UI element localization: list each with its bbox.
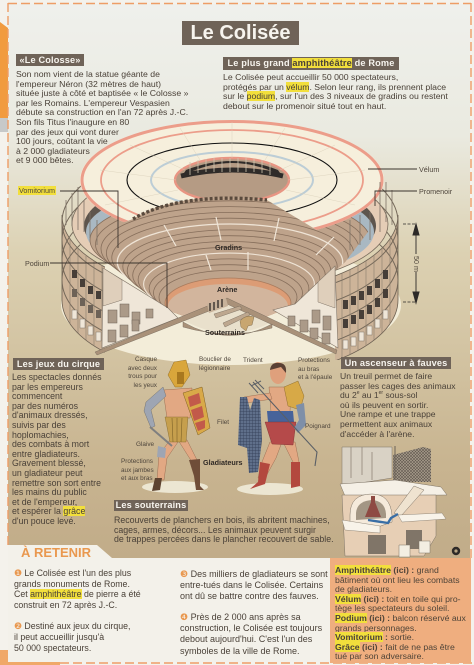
promenoir leader xyxy=(375,191,417,206)
label: protections jambes xyxy=(121,458,154,482)
text: jeux du cirque: suivis par des xyxy=(12,420,66,430)
point 1: grands monuments de Rome. xyxy=(14,579,130,589)
label: protections bras xyxy=(298,357,332,381)
text: le colosse: par des jeux qui vont durer xyxy=(16,127,119,137)
retenir white panel xyxy=(8,545,330,662)
gladiator with shield xyxy=(142,360,210,493)
point 1: Cet amphithéâtre de pierre a été xyxy=(14,589,141,599)
belt xyxy=(267,411,294,422)
page-number badge xyxy=(452,547,460,555)
label: gradins: Gradins xyxy=(215,243,242,252)
label: protections bras: et à l'épaule xyxy=(298,374,332,381)
point 1: construit en 72 après J.-C. xyxy=(14,600,117,610)
label: protections jambes: Protections xyxy=(121,458,153,465)
point 4: construction, le Colisée est toujours xyxy=(180,623,322,633)
label: protections jambes: aux jambes xyxy=(121,467,154,474)
glossary: Grâce (ici) : fait de ne pas être xyxy=(335,642,455,652)
label: trident: Trident xyxy=(243,357,263,364)
title: Le Colisée xyxy=(190,22,291,44)
text: jeux du cirque: entre gladiateurs. xyxy=(12,449,80,459)
heading: souterrains: Les souterrains xyxy=(116,500,186,510)
text: le colosse: située juste à côté et baptisée « le Colosse » xyxy=(16,88,188,98)
text: ascenseur: permettent aux animaux xyxy=(340,419,432,429)
velum inner opening xyxy=(175,158,289,202)
glossary: tège les spectateurs du soleil. xyxy=(335,603,449,613)
text: le colosse: et 9 000 bêtes. xyxy=(16,155,73,165)
point 1 xyxy=(14,568,141,610)
point 2 xyxy=(14,621,130,653)
text: amphitheatre: Le Colisée peut accueillir 50 000 spectateurs, xyxy=(223,72,398,82)
text: le colosse: par les Romains. L'empereur Vespasien xyxy=(16,98,170,108)
label: poignard: Poignard xyxy=(305,423,331,430)
ramp xyxy=(394,486,424,516)
text: souterrains: de trappes percées dans le plancher recouvert de sable. xyxy=(114,534,334,544)
columns drums xyxy=(399,541,430,557)
label: velum: Vélum xyxy=(419,165,439,174)
seating stair lines xyxy=(164,217,334,270)
blue arm guard xyxy=(294,403,306,433)
net wall xyxy=(393,447,431,482)
glossary panel xyxy=(330,558,471,663)
point 1: ❶ Le Colisée est l'un des plus xyxy=(14,568,131,578)
orange side tab xyxy=(0,22,8,118)
text: ascenseur: Une rampe et une trappe xyxy=(340,409,436,419)
shield xyxy=(183,387,210,435)
gold shoulder xyxy=(284,381,304,410)
heading: a retenir: À RETENIR xyxy=(21,545,91,560)
trident xyxy=(253,382,317,466)
label: gladiateurs: Gladiateurs xyxy=(203,458,243,467)
text: le colosse: débute sa construction en l'an 72 après J.-C. xyxy=(16,107,188,117)
outer wall xyxy=(62,186,398,360)
colosseum illustration xyxy=(50,120,419,378)
text: jeux du cirque: par les empereurs xyxy=(12,382,83,392)
ground-level arches xyxy=(72,310,388,349)
dagger xyxy=(150,427,172,446)
text: jeux du cirque: Les spectacles donnés xyxy=(12,372,102,382)
lower building xyxy=(342,495,436,556)
glossary: grands personnages. xyxy=(335,623,417,633)
text: jeux du cirque: des combats à mort xyxy=(12,439,89,449)
point 2: 50 000 spectateurs. xyxy=(14,643,91,653)
ground pool xyxy=(61,245,401,365)
souterrains wedge xyxy=(95,298,337,355)
text: le colosse: Son nom vient de la statue géante de xyxy=(16,69,160,79)
grey side tab xyxy=(0,118,8,132)
text: amphitheatre: sur le podium, sur l'un des 3 niveaux de gradins ou restent xyxy=(223,91,448,101)
text: jeux du cirque: d'animaux dressés, xyxy=(12,410,88,420)
label: souterrains: Souterrains xyxy=(205,328,245,337)
label: bouclier xyxy=(199,356,231,372)
point 4: debout aujourd'hui. C'est l'un des xyxy=(180,634,312,644)
text: jeux du cirque: par des numéros xyxy=(12,401,78,411)
dark arcade xyxy=(184,161,280,173)
heading: ascenseur: Un ascenseur à fauves xyxy=(345,358,447,368)
seating bowl xyxy=(90,198,368,316)
heading: amphitheatre: Le plus grand amphithéâtre de Rome xyxy=(228,58,394,68)
label: protections bras: au bras xyxy=(298,366,319,373)
glossary: Podium (ici) : balcon réservé aux xyxy=(335,613,466,623)
label: podium: Podium xyxy=(25,259,49,268)
glossary: Vélum (ici) : toit en toile qui pro- xyxy=(335,594,461,604)
heading: le colosse: «Le Colosse» xyxy=(19,55,81,65)
glossary: bâtiment où ont lieu les combats xyxy=(335,575,460,585)
text: jeux du cirque: Gravement blessé, xyxy=(12,458,86,468)
height arrow xyxy=(403,224,419,303)
stone floor slab xyxy=(340,480,447,496)
glossary: Vomitorium : sortie. xyxy=(335,632,414,642)
point 2: il peut accueillir jusqu'à xyxy=(14,632,104,642)
orange corner xyxy=(0,650,60,665)
text: souterrains xyxy=(114,515,334,544)
text: amphitheatre xyxy=(223,72,448,111)
text: ascenseur: Un treuil permet de faire xyxy=(340,371,432,381)
label: vomitorium: Vomitorium xyxy=(19,186,55,195)
text: jeux du cirque: et espérer la grâce xyxy=(12,506,85,516)
slabs xyxy=(342,513,446,533)
glossary: Amphithéâtre (ici) : grand xyxy=(335,565,439,575)
lion xyxy=(240,316,254,331)
text: le colosse xyxy=(16,69,188,165)
glossary xyxy=(335,565,466,661)
masts xyxy=(66,182,392,250)
left cut face xyxy=(102,268,178,348)
golden skirt xyxy=(165,417,188,442)
heading: jeux du cirque: Les jeux du cirque xyxy=(17,359,100,369)
podium leader xyxy=(50,263,167,308)
leg guard xyxy=(157,446,166,458)
text: le colosse: 100 jours, coûtant la vie xyxy=(16,136,108,146)
text: jeux du cirque: remettre son sort entre xyxy=(12,478,101,488)
text: le colosse: à 2 000 gladiateurs xyxy=(16,146,90,156)
gates xyxy=(368,535,386,554)
velum cords xyxy=(100,122,365,205)
colonnade rim xyxy=(133,198,267,219)
text: jeux du cirque: hoplomachies, xyxy=(12,430,69,440)
text: ascenseur: où ils peuvent en sortir. xyxy=(340,400,428,410)
velum leader xyxy=(368,168,417,170)
point 3: entre-tués dans le Colisée. Certains xyxy=(180,580,323,590)
point 4: symboles de la ville de Rome. xyxy=(180,646,300,656)
dark upper gallery xyxy=(84,174,376,278)
label: protections jambes: et aux bras xyxy=(121,475,153,482)
labels: gladiator left: avec deux xyxy=(128,365,157,372)
label: promenoir: Promenoir xyxy=(419,187,452,196)
glossary: tué par son adversaire. xyxy=(335,651,424,661)
point 3: ont dû se battre contre des fauves. xyxy=(180,591,319,601)
text: ascenseur: d'accéder à l'arène. xyxy=(340,429,414,439)
lift illustration xyxy=(340,446,447,557)
point 3: ❸ Des milliers de gladiateurs se sont xyxy=(180,569,328,579)
wall pilasters xyxy=(70,239,390,358)
text: souterrains: Recouverts de planchers en bois, ils abritent machines, xyxy=(114,515,330,525)
glossary: de gladiateurs. xyxy=(335,584,392,594)
inner wall band xyxy=(72,162,388,286)
text: jeux du cirque: d'un pouce levé. xyxy=(12,516,76,526)
golden helmet xyxy=(168,360,190,387)
point 4: ❹ Près de 2 000 ans après sa xyxy=(180,612,301,622)
net xyxy=(238,397,262,473)
label: arene: Arène xyxy=(217,285,237,294)
gladiator with trident xyxy=(237,362,317,495)
red skirt xyxy=(265,422,296,445)
text: jeux du cirque: commencent xyxy=(12,391,62,401)
text: jeux du cirque: et de l'empereur, xyxy=(12,497,77,507)
arena floor xyxy=(168,284,288,316)
text: ascenseur: passer les cages des animaux xyxy=(340,381,456,391)
label: bouclier: légionnaire xyxy=(199,365,230,372)
point 2: ❷ Destiné aux jeux du cirque, xyxy=(14,621,130,631)
arena rim xyxy=(164,278,292,316)
text: amphitheatre: debout sur le promenoir situé tout en haut. xyxy=(223,101,386,111)
label: 50 m: 50 m xyxy=(412,256,421,272)
label: bouclier: Bouclier de xyxy=(199,356,231,363)
text: ascenseur xyxy=(340,371,456,439)
text: amphitheatre: protégés par un vélum. Selon leur rang, ils prennent place xyxy=(223,82,446,92)
cage with red arrow xyxy=(365,496,381,517)
text: ascenseur: du 2e au 1er sous-sol xyxy=(340,390,417,400)
label: filet: Filet xyxy=(217,419,229,426)
text: le colosse: l'empereur Néron (32 mètres de haut) xyxy=(16,79,161,89)
wall windows xyxy=(72,270,388,328)
label: protections bras: Protections xyxy=(298,357,330,364)
text: le colosse: Son fils Titus l'inaugure en 80 xyxy=(16,117,129,127)
vomitorium leader xyxy=(60,191,118,248)
labels: gladiator left: les yeux xyxy=(134,382,157,389)
text: jeux du cirque xyxy=(12,372,102,526)
labels: gladiator left: trous pour xyxy=(128,373,157,380)
right cut face xyxy=(273,266,338,348)
text: souterrains: cages, armes, décors... Les animaux peuvent surgir xyxy=(114,525,316,535)
velum xyxy=(80,120,384,240)
boot xyxy=(189,459,204,490)
arch xyxy=(350,494,392,530)
grey arm guard xyxy=(144,387,166,428)
labels: gladiator left xyxy=(128,356,157,389)
blue gallery rim xyxy=(86,184,374,280)
label: glaive: Glaive xyxy=(136,441,154,448)
text: jeux du cirque: les mains du public xyxy=(12,487,87,497)
boots xyxy=(250,462,270,489)
blue path arrow xyxy=(368,514,398,523)
small dark gallery xyxy=(207,298,228,313)
point 4 xyxy=(180,612,322,656)
labels: gladiator left: Casque xyxy=(135,356,157,363)
head xyxy=(270,362,286,384)
text: jeux du cirque: un gladiateur peut xyxy=(12,468,82,478)
point 3 xyxy=(180,569,328,601)
